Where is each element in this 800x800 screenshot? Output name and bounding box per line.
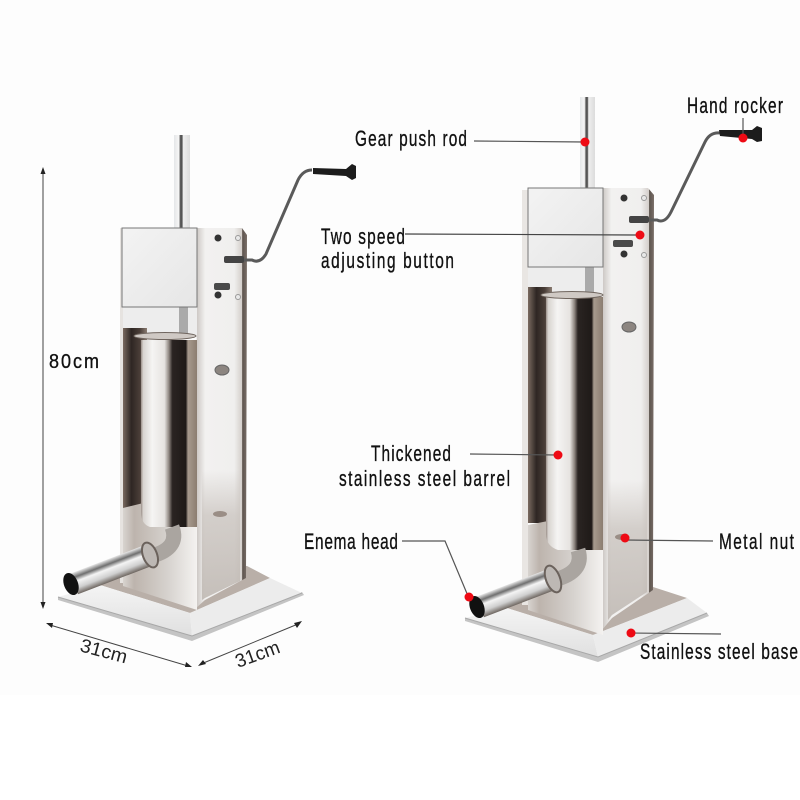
- crank shaft knob: [224, 256, 244, 263]
- barrel collar: [134, 332, 196, 340]
- callout: hand rocker: [687, 94, 783, 142]
- stainless base: [58, 566, 302, 636]
- callout: enema head: [304, 530, 474, 602]
- handle: [313, 164, 356, 180]
- dimension arrow: depth 31cm: [46, 623, 192, 667]
- base shadow: [58, 592, 304, 641]
- window dark interior: [528, 287, 552, 523]
- callout: metal nut: [620, 530, 795, 555]
- window upper area: [123, 307, 197, 337]
- window dark interior: [123, 328, 147, 508]
- left machine: sausage stuffer: [58, 135, 356, 641]
- callout: hand rocker: Hand rocker: [687, 94, 783, 119]
- dimension label: 31cm right: 31cm: [233, 637, 283, 673]
- callout: stainless steel base: Stainless steel base: [640, 640, 798, 665]
- barrel: [546, 297, 603, 550]
- right column: [196, 228, 247, 608]
- callout: two speed adjusting button: [321, 225, 644, 274]
- bolts: [613, 194, 646, 540]
- right column: [602, 188, 654, 630]
- handle: [719, 126, 762, 142]
- callout: thickened stainless steel barrel: Thickened: [371, 442, 451, 467]
- lower frame: [528, 510, 603, 635]
- stainless base: [465, 586, 707, 657]
- barrel: [141, 340, 197, 527]
- dimension arrow: height 80cm: [40, 167, 46, 609]
- lower frame: [123, 490, 197, 610]
- callout: thickened stainless steel barrel: stainless steel barrel: [339, 467, 510, 492]
- callout: stainless steel base: [626, 628, 798, 665]
- window upper area: [528, 267, 603, 297]
- crank arm: [640, 133, 720, 221]
- dimension label: 31cm left: 31cm: [78, 636, 130, 668]
- crank arm: [235, 170, 312, 261]
- push rod: [580, 97, 595, 189]
- left frame strip: [120, 228, 124, 583]
- callout: metal nut: Metal nut: [719, 530, 795, 555]
- column lower reflection: [202, 470, 240, 600]
- outlet tube: [60, 527, 174, 597]
- gear box cover: [528, 188, 603, 267]
- gear box cover: [122, 228, 197, 307]
- dimension arrow: width 31cm: [198, 621, 302, 666]
- bolts: [213, 234, 240, 517]
- callout: gear push rod: Gear push rod: [355, 127, 467, 152]
- left frame strip: [522, 190, 528, 605]
- barrel collar: [541, 292, 603, 298]
- right machine: sausage stuffer: [465, 97, 762, 662]
- dimension label: 80cm: 80cm: [49, 351, 99, 373]
- callout: enema head: Enema head: [304, 530, 398, 555]
- crank shaft knob: [629, 216, 649, 223]
- push rod: [174, 135, 190, 229]
- callout: gear push rod: [355, 127, 590, 152]
- callout: two speed adjusting button: adjusting button: [321, 249, 454, 274]
- base shadow: [465, 613, 709, 662]
- callout: thickened stainless steel barrel: [339, 442, 562, 492]
- column lower reflection: [608, 480, 647, 620]
- callout: two speed adjusting button: Two speed: [321, 225, 405, 250]
- outlet tube: [466, 550, 579, 620]
